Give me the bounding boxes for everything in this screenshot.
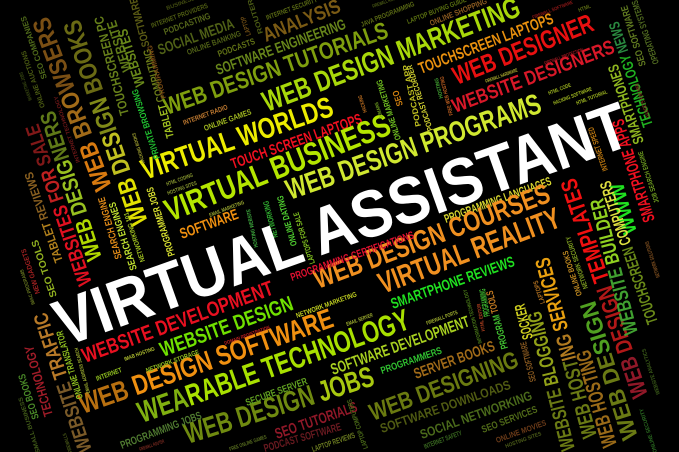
heading: web design software: WEB DESIGN SOFTWARE xyxy=(75,303,337,420)
panel: lower right vertical columns: ONLINE BOOKS xyxy=(561,249,584,297)
heading: tablet reviews: TABLET REVIEWS xyxy=(22,170,66,265)
panel: lower left vertical columns: TECHNOLOGY xyxy=(21,344,56,418)
heading: website designers: WEBSITE DESIGNERS xyxy=(449,36,618,118)
panel: red designer headings, upper right xyxy=(416,0,618,118)
panel: red designer headings, upper right: HACKING SOFTWARE xyxy=(553,86,593,107)
heading: seo tutorials: SEO TUTORIALS xyxy=(273,399,360,443)
panel: dim keywords, bottom centre: SOFTWARE DOWNLOADS xyxy=(378,377,513,436)
panel: upper left vertical columns: PRIVATE BROWSING xyxy=(130,88,162,160)
small keywords beside virtual worlds: HTML CODING xyxy=(166,173,194,188)
panel: red designer headings, upper right: HTML CODE xyxy=(548,83,572,97)
panel: lower keyword headings xyxy=(75,174,565,452)
heading: website builder: WEBSITE BUILDER xyxy=(586,196,643,337)
panel: lower right vertical columns: SEO SOFTWARE xyxy=(518,341,538,383)
panel: lower right vertical columns: PROGRAM TOOLS xyxy=(485,289,511,350)
panel: centre small vertical keywords: PODCAST APP xyxy=(401,63,423,127)
panel: lower keyword headings: NETWORK MARKETING xyxy=(295,291,358,320)
heading: virtual reality: VIRTUAL REALITY xyxy=(374,202,565,301)
panel: lower keyword headings: DOMAIN REGISTRATION xyxy=(224,325,271,347)
panel: dim keywords, bottom centre: SEO SERVICES xyxy=(480,404,539,436)
top dim keyword cluster: LAPTOP xyxy=(240,15,253,37)
heading: website blogging: WEBSITE BLOGGING xyxy=(524,309,580,452)
heading: web design jobs: WEB DESIGN JOBS xyxy=(180,361,378,451)
top dim keyword cluster: PODCASTING xyxy=(162,11,212,37)
panel: centre small vertical keywords: HOSTING xyxy=(434,77,445,99)
panel: upper left vertical columns: PROGRAMMER JOBS xyxy=(145,185,178,257)
panel: upper left vertical columns: SEARCH ENGINE xyxy=(97,195,125,260)
heading: website traffic: WEBSITE TRAFFIC xyxy=(30,310,97,452)
top dim keyword cluster: ROUTER xyxy=(247,0,265,35)
heading: web design tutorials: WEB DESIGN TUTORIALS xyxy=(160,17,392,121)
panel: upper left vertical columns: INTERNET TECHNOLOGY xyxy=(53,95,82,163)
heading: www: WWW xyxy=(606,181,642,237)
panel: lower right vertical columns: HTML EDITOR xyxy=(476,303,487,332)
panel: upper right vertical columns: JOB SEARCH ENGINE xyxy=(637,150,661,204)
panel: upper left vertical columns: WEBSITE xyxy=(103,19,135,74)
small keywords beside virtual worlds: EMAIL MARKETING xyxy=(209,200,245,219)
heading: web design courses: WEB DESIGN COURSES xyxy=(309,178,554,295)
panel: upper left vertical columns: NETWORKING xyxy=(261,200,280,239)
top dim keyword cluster: SOCIAL MEDIA xyxy=(156,15,237,59)
panel: lower left vertical columns: ONLINE TRANSLATOR xyxy=(55,329,86,400)
panel: dim keywords, bottom centre: LAPTOP COMPUTERS xyxy=(346,398,370,450)
panel: centre small vertical keywords: HACKING xyxy=(358,94,369,113)
panel: upper left vertical columns: HOSTING WEBSITE xyxy=(246,208,260,248)
panel: lower right vertical columns: PROGRAMMING xyxy=(477,288,492,317)
heading: smartphone apps: SMARTPHONE APPS xyxy=(609,117,659,225)
panel: lower right vertical columns: ONLINE SECURITY xyxy=(639,407,659,452)
panel: lower right vertical columns: WEBSITE ANALYTICS xyxy=(641,347,662,395)
panel: lower keyword headings: INTERNET xyxy=(95,367,124,383)
heading: web design programs: WEB DESIGN PROGRAMS xyxy=(282,88,545,207)
heading: web browsers: WEB BROWSERS xyxy=(27,13,118,195)
panel: dim keywords, bottom centre: INTERNET SAFETY xyxy=(423,430,463,451)
small keywords beside virtual worlds: HOSTING SITES xyxy=(167,181,198,197)
panel: lower right vertical columns: LAPTOPS xyxy=(533,279,547,305)
heading: server books: SERVER BOOKS xyxy=(412,338,497,383)
panel: red designer headings, upper right: HTML TUTORIAL xyxy=(576,89,609,107)
heading: wearable technology: WEARABLE TECHNOLOGY xyxy=(133,303,414,430)
panel: lower left vertical columns: EMAIL ADDRESS SEARCH xyxy=(74,347,92,394)
heading: web designing: WEB DESIGNING xyxy=(366,346,522,427)
panel: dim keywords, bottom centre xyxy=(346,338,548,451)
panel: centre small vertical keywords: FREE WEB HOSTING xyxy=(439,76,455,116)
panel: red designer headings, upper right: HTML xyxy=(578,4,592,14)
heading: virtual worlds: VIRTUAL WORLDS xyxy=(137,91,337,187)
panel: upper left vertical columns xyxy=(18,0,317,288)
heading: websites for sale: WEBSITES FOR SALE xyxy=(22,121,97,288)
top dim keyword cluster: ONLINE BANKING xyxy=(186,29,242,57)
heading: programming languages: PROGRAMMING LANGUAGES xyxy=(442,174,553,226)
panel: upper left vertical columns: WEBSITES xyxy=(114,27,148,89)
heading: web design: WEB DESIGN xyxy=(575,298,643,443)
panel: upper left vertical columns: SEO COMPANIES xyxy=(19,14,49,80)
panel: dim keywords, bottom centre: ONLINE MOVIES xyxy=(495,418,548,445)
panel: lower keyword headings: PROGRAMMING JOBS xyxy=(119,410,203,452)
small keywords beside virtual worlds: INTERNET RADIO xyxy=(182,104,229,127)
panel: upper right vertical columns: TECHNOLOGY NEWS xyxy=(606,19,657,129)
panel: lower left vertical columns: SEO TOOLS xyxy=(30,238,60,299)
panel: lower right vertical columns xyxy=(463,175,662,452)
panel: red designer headings, upper right: FIREWALL PROTECTION xyxy=(544,47,584,67)
heading: touch screen laptops: TOUCH SCREEN LAPTOPS xyxy=(229,111,364,173)
panel: lower left vertical columns: SMALL BUSINESS xyxy=(18,396,42,452)
small keywords beside virtual worlds: ONLINE GAMES xyxy=(203,107,253,133)
panel: lower keyword headings: IMAB HOSTING xyxy=(124,346,156,363)
panel: upper right vertical columns: SMARTPHONES xyxy=(605,62,648,146)
panel: lower left vertical columns: IMAC PROGRAMS xyxy=(19,268,37,305)
panel: centre small vertical keywords: SEO xyxy=(390,89,405,107)
panel: centre small vertical keywords: PODCAST RECORDER xyxy=(405,64,435,132)
top dim keyword cluster xyxy=(150,0,488,79)
panel: upper right vertical columns: INTERNET SPEED xyxy=(586,126,610,172)
panel: lower right vertical columns: NETWORK SOLUTIONS xyxy=(644,240,662,278)
panel: lower keyword headings: NETWORK STORAGE xyxy=(145,349,201,375)
small keywords beside virtual worlds: SOFTWARE xyxy=(178,206,241,243)
panel: upper left vertical columns: ONLINE AUCTIONS xyxy=(21,49,47,109)
top dim keyword cluster: PODCASTS xyxy=(216,36,256,59)
panel: upper left vertical columns: ONLINE DATING xyxy=(275,194,299,247)
panel: lower left vertical columns: NEW GADGETS xyxy=(21,247,42,295)
heading: web design templates: WEB DESIGN TEMPLATES xyxy=(555,175,653,402)
panel: upper right vertical columns xyxy=(586,0,661,237)
panel: lower right vertical columns: INFORMATION TECHNOLOGY xyxy=(463,288,484,344)
panel: lower left vertical columns xyxy=(17,238,97,452)
panel: upper right vertical columns: GADGETS FOR MEN xyxy=(634,82,652,118)
heading: virtual business: VIRTUAL BUSINESS xyxy=(159,106,396,229)
heading: touchscreen computers: TOUCHSCREEN COMPUTERS xyxy=(598,178,662,326)
panel: lower keyword headings: FIREWALL PORTS xyxy=(426,310,459,327)
panel: lower left vertical columns: SEO BOOKS xyxy=(17,372,42,420)
heading: web design books: WEB DESIGN BOOKS xyxy=(58,16,154,229)
panel: lower keyword headings: PROGRAMMERS xyxy=(379,346,444,377)
panel: lower keyword headings: EMAIL SERVER xyxy=(346,313,374,328)
panel: upper left vertical columns: MARKETING JOBS xyxy=(18,71,34,101)
heading: web hosting: WEB HOSTING xyxy=(572,347,622,450)
heading: software development: SOFTWARE DEVELOPMENT xyxy=(329,313,472,379)
panel: centre small vertical keywords: DOMAINS xyxy=(374,101,385,119)
panel: upper left vertical columns: NETWORKING 101 xyxy=(123,211,147,263)
heading: web designers: WEB DESIGNERS xyxy=(35,108,107,264)
panel: lower keyword headings: SECURE SERVER xyxy=(244,376,310,409)
panel: lower right vertical columns: SOCKER xyxy=(512,302,537,341)
panel: red designer headings, upper right: FIREWALL HARDWARE xyxy=(485,67,519,85)
panel: upper left vertical columns: PROGRAMMING xyxy=(147,44,168,99)
panel: upper left vertical columns: LAPTOPS FOR SALE xyxy=(292,211,317,265)
heading: website development: WEBSITE DEVELOPMENT xyxy=(79,277,277,368)
panel: centre small vertical keywords xyxy=(358,63,455,141)
panel: dim keywords, bottom centre: SOCIAL NETWORKING xyxy=(418,388,534,442)
heading: smartphone reviews: SMARTPHONE REVIEWS xyxy=(389,253,517,313)
panel: lower right vertical columns: NETWORK SECURITY xyxy=(565,235,590,290)
panel: centre small vertical keywords: ONLINE MARKETING xyxy=(374,78,403,141)
small keywords beside virtual worlds xyxy=(166,104,253,243)
panel: upper left vertical columns: SEARCH ENGINES xyxy=(107,200,140,271)
heading: programming certifications: PROGRAMMING CERTIFICATIONS xyxy=(289,230,416,284)
panel: upper left vertical columns: HACKING BOOKS xyxy=(131,131,147,164)
heading: website design: WEBSITE DESIGN xyxy=(157,292,296,362)
panel: dim keywords, bottom centre: HOSTING SITES xyxy=(505,431,543,450)
heading: web hosting services: WEB HOSTING SERVICES xyxy=(531,255,602,441)
